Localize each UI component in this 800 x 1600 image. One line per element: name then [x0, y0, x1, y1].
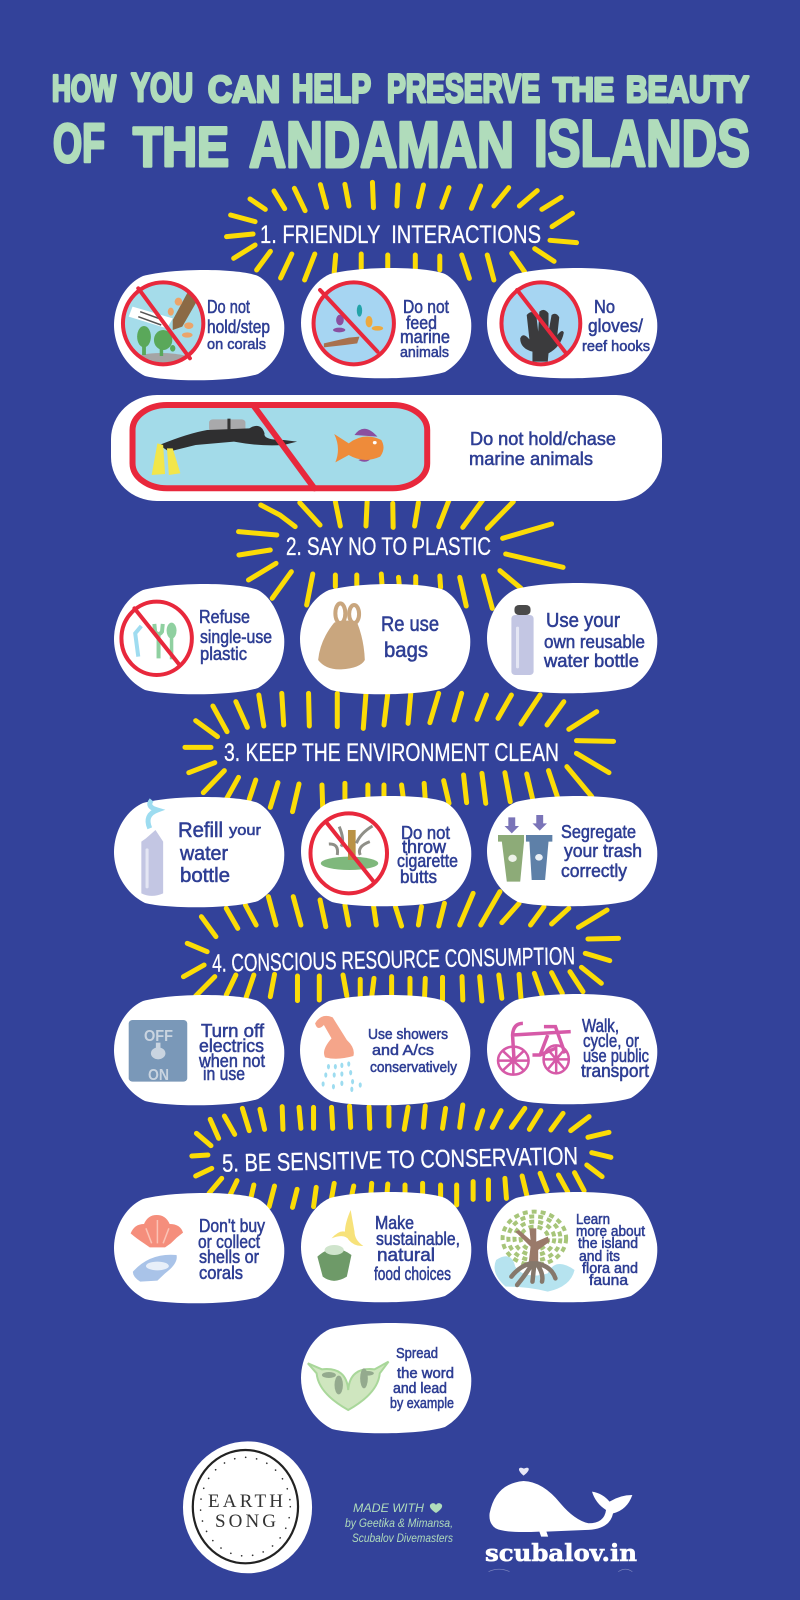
- card: no gloves or reef hooks: [487, 268, 657, 378]
- text: in use: [203, 1064, 245, 1084]
- text: gloves/: [588, 316, 643, 336]
- text: [207, 297, 270, 353]
- icon: shells: [131, 1215, 183, 1282]
- icon: light switch: [129, 1020, 187, 1084]
- text: Do not: [401, 823, 450, 843]
- credit: made with love: by Geetika & Mimansa,: [345, 1516, 453, 1530]
- title: YOU: [131, 66, 193, 110]
- icon: banana and coconut: [317, 1210, 363, 1281]
- text: reef hooks: [582, 338, 650, 355]
- text: plastic: [200, 644, 247, 664]
- text: Turn off: [201, 1021, 265, 1041]
- text: fauna: [589, 1272, 629, 1289]
- text: hold/step: [207, 317, 270, 337]
- text: [576, 1211, 646, 1289]
- card: use showers and A/Cs conservatively: [300, 995, 470, 1105]
- title: BEAUTY: [626, 69, 749, 110]
- text: Walk,: [582, 1016, 619, 1036]
- heading: section 4: 4. CONSCIOUS RESOURCE CONSUMPTION: [212, 942, 575, 978]
- text: [469, 429, 616, 469]
- icon: mangrove tree: [495, 1212, 575, 1292]
- text: Learn: [576, 1211, 610, 1228]
- logo: scubalov whale: [485, 1468, 637, 1572]
- title: OF: [53, 112, 105, 174]
- text: conservatively: [370, 1059, 457, 1076]
- text: [543, 610, 645, 671]
- text: transport: [581, 1061, 649, 1081]
- text: feed: [406, 313, 437, 333]
- title: [52, 66, 750, 181]
- card: don't buy or collect shells or corals: [114, 1193, 284, 1303]
- text: animals: [400, 344, 449, 361]
- card: refill your water bottle: [114, 797, 284, 907]
- text: marine: [400, 327, 450, 347]
- text: Don't buy: [199, 1216, 265, 1236]
- text: Make: [375, 1213, 414, 1233]
- rays: section 1: [227, 182, 577, 280]
- credit: made with love: MADE WITH: [353, 1501, 424, 1515]
- text: [198, 1216, 265, 1283]
- text: Segregate: [561, 822, 636, 842]
- rays: section 5: [192, 1105, 611, 1207]
- text: water bottle: [543, 651, 639, 671]
- text: or collect: [198, 1232, 260, 1252]
- text: single-use: [200, 627, 272, 647]
- credit: made with love: Scubalov Divemasters: [352, 1531, 453, 1545]
- heading: section 2: 2. SAY NO TO PLASTIC: [286, 533, 491, 561]
- text: Re use: [381, 613, 439, 636]
- title: THE: [553, 71, 614, 108]
- text: Use showers: [368, 1026, 448, 1043]
- text: more about: [576, 1223, 646, 1240]
- text: Do not hold/chase: [470, 429, 616, 449]
- text: correctly: [561, 861, 627, 881]
- text: your: [229, 822, 261, 839]
- heading: section 3: 3. KEEP THE ENVIRONMENT CLEAN: [224, 739, 559, 767]
- text: the word: [397, 1365, 454, 1382]
- logo: Earth Song: EARTH: [208, 1491, 283, 1512]
- icon: no gloves: [501, 282, 580, 364]
- text: own reusable: [544, 632, 645, 652]
- text: Do not: [403, 297, 449, 317]
- icon: diver chasing fish: [133, 405, 427, 488]
- text: Do not: [207, 297, 250, 317]
- text: and A/cs: [372, 1042, 434, 1059]
- text: flora and: [582, 1260, 638, 1277]
- title: CAN: [208, 69, 280, 110]
- card: turn off electrics when not in use: [114, 995, 284, 1105]
- text: Use your: [546, 610, 620, 632]
- text: when not: [198, 1051, 265, 1071]
- text: natural: [377, 1245, 435, 1265]
- icon: light switch: ON: [148, 1067, 169, 1084]
- text: [397, 823, 458, 887]
- card: do not throw cigarette butts: [301, 796, 471, 906]
- rays: section 4: [183, 892, 619, 1001]
- icon: bottle refill: [141, 800, 163, 896]
- card: do not hold or step on corals: [114, 270, 284, 380]
- text: [400, 297, 450, 361]
- card: refuse single-use plastic: [114, 584, 284, 694]
- text: cigarette: [397, 851, 458, 871]
- text: shells or: [199, 1247, 259, 1267]
- icon: no feeding: [314, 282, 394, 364]
- text: by example: [390, 1395, 454, 1412]
- logo: Earth Song: [183, 1441, 312, 1573]
- text: water: [179, 843, 228, 865]
- text: [390, 1345, 454, 1412]
- title: PRESERVE: [387, 67, 540, 111]
- text: Refill: [178, 819, 223, 842]
- rays: section 3: [185, 693, 614, 812]
- card: re-use bags: [300, 584, 470, 694]
- text: food choices: [374, 1264, 451, 1284]
- card: learn about the island's flora and fauna: [487, 1192, 657, 1302]
- text: [198, 1021, 265, 1084]
- text: throw: [402, 837, 447, 857]
- text: and lead: [393, 1380, 447, 1397]
- text: Refuse: [199, 607, 250, 627]
- title: ANDAMAN: [249, 108, 514, 181]
- icon: no plastic cutlery: [121, 602, 192, 675]
- text: [374, 1213, 460, 1284]
- text: corals: [199, 1263, 243, 1283]
- title: THE: [133, 115, 229, 178]
- text: use public: [583, 1046, 649, 1066]
- text: [561, 822, 642, 881]
- text: Spread: [396, 1345, 438, 1362]
- icon: shower: [315, 1016, 362, 1092]
- card: spread the word and lead by example: [301, 1323, 471, 1433]
- heading: section 5: 5. BE SENSITIVE TO CONSERVATION: [222, 1142, 578, 1178]
- card: walk, cycle or use public transport: [487, 994, 657, 1104]
- text: butts: [400, 867, 437, 887]
- card: segregate your trash correctly: [487, 796, 657, 906]
- icon: no touching corals: [123, 282, 203, 364]
- text: the island: [578, 1235, 638, 1252]
- text: your trash: [564, 841, 642, 861]
- text: [582, 297, 650, 355]
- icon: cloth bag: [318, 603, 365, 669]
- text: [368, 1026, 457, 1076]
- text: and its: [579, 1248, 620, 1265]
- heading: section 1: 1. FRIENDLY INTERACTIONS: [260, 221, 541, 249]
- icon: sprouting leaves: [308, 1362, 389, 1410]
- text: electrics: [199, 1036, 264, 1056]
- icon: bicycle: [498, 1023, 571, 1075]
- card: make sustainable natural food choices: [301, 1192, 471, 1302]
- title: HOW: [52, 68, 116, 109]
- text: cycle, or: [583, 1031, 639, 1051]
- text: [199, 607, 272, 664]
- text: bottle: [180, 865, 230, 887]
- logo: scubalov whale: scubalov.in: [485, 1540, 637, 1567]
- title: HELP: [292, 67, 371, 111]
- text: [381, 613, 439, 662]
- text: [178, 819, 261, 887]
- icon: light switch: OFF: [144, 1028, 173, 1045]
- rays: section 2: [239, 500, 563, 608]
- icon: trash bins: [498, 815, 552, 882]
- icon: no cigarette butts: [310, 813, 387, 893]
- icon: reusable bottle: [511, 605, 534, 675]
- credit: made with love: [345, 1501, 453, 1545]
- text: [581, 1016, 649, 1081]
- card: use your own reusable water bottle: [487, 583, 657, 693]
- text: bags: [384, 639, 428, 662]
- logo: Earth Song: SONG: [215, 1511, 276, 1532]
- card: do not feed marine animals: [301, 268, 471, 378]
- card: do not hold or chase marine animals: [111, 395, 662, 501]
- text: on corals: [207, 336, 266, 353]
- text: marine animals: [469, 449, 593, 469]
- text: sustainable,: [376, 1229, 460, 1249]
- text: No: [594, 297, 615, 317]
